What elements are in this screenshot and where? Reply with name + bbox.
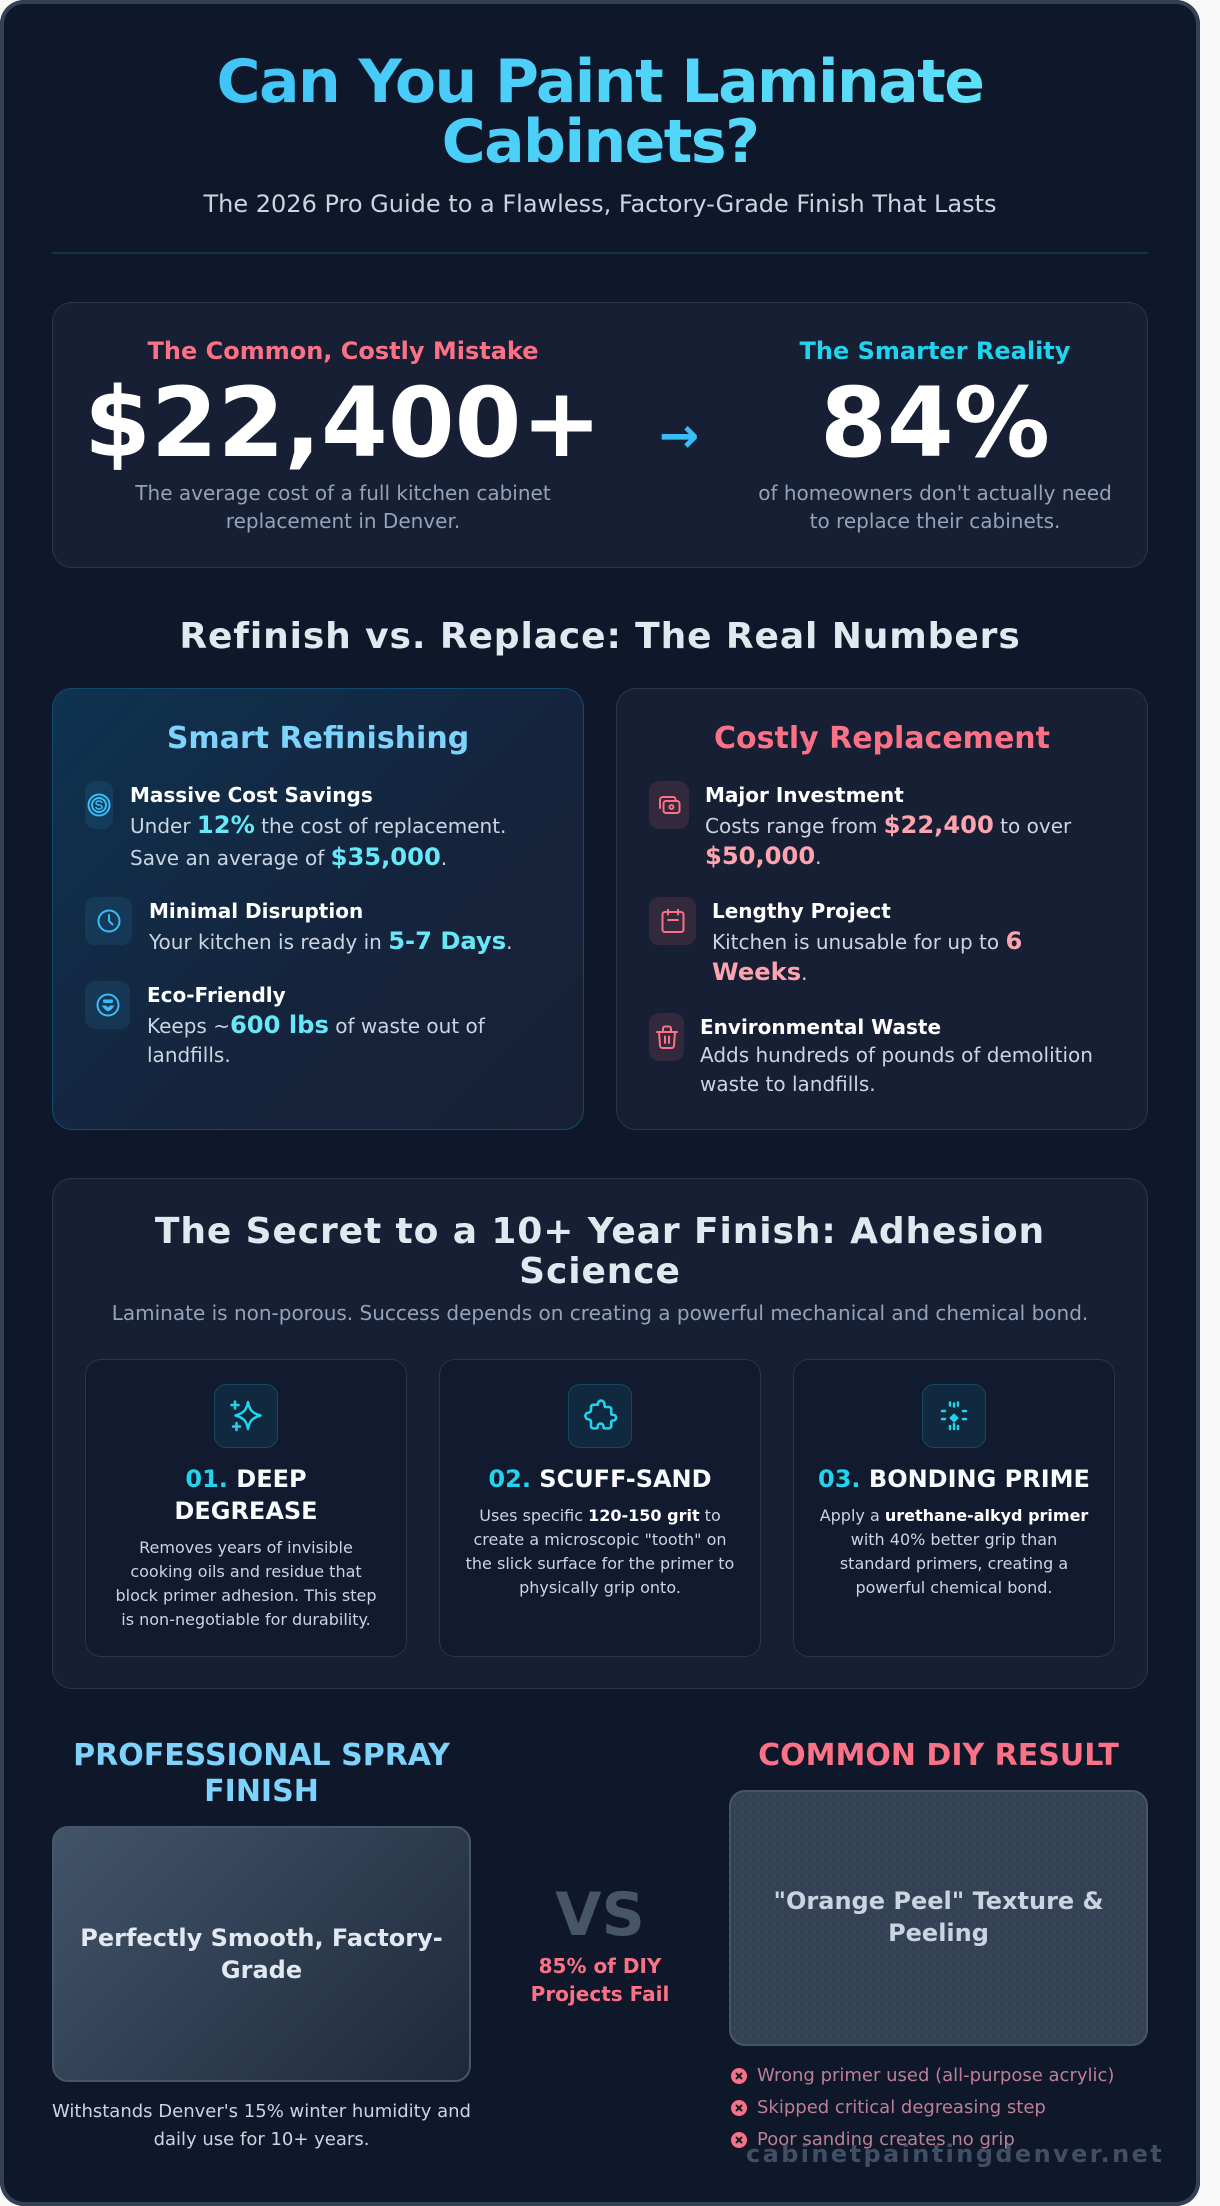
column: professional finish xyxy=(52,1738,471,2150)
list text: Poor sanding creates no grip xyxy=(757,2129,1015,2150)
item title: Major Investment xyxy=(705,783,904,807)
heading: professional spray finish: FINISH xyxy=(204,1774,319,1809)
heading: adhesion science xyxy=(155,1211,1045,1292)
icon: calendar xyxy=(649,897,696,945)
caption: replacement cost: replacement in Denver. xyxy=(226,509,460,533)
step title: 02. SCUFF-SAND xyxy=(488,1465,712,1493)
swatch label xyxy=(80,1924,443,1984)
icon: bonding xyxy=(922,1384,986,1448)
item text: waste to landfills. xyxy=(700,1072,876,1096)
item title: Minimal Disruption xyxy=(149,899,363,923)
item text xyxy=(700,1043,1093,1096)
step description: cooking oils and residue that xyxy=(130,1562,362,1581)
icon: sparkles xyxy=(214,1384,278,1448)
icon: x mark xyxy=(731,2132,747,2148)
step description: Uses specific 120-150 grit to xyxy=(479,1506,721,1525)
title: Can You Paint Laminate xyxy=(217,47,983,117)
step description: Apply a urethane-alkyd primer xyxy=(820,1506,1088,1525)
list item: wrong primer xyxy=(731,2065,1114,2086)
icon: puzzle piece xyxy=(568,1384,632,1448)
step description xyxy=(115,1538,377,1629)
item text: Adds hundreds of pounds of demolition xyxy=(700,1043,1093,1067)
swatch label: Perfectly Smooth, Factory- xyxy=(80,1924,443,1952)
step title: DEGREASE xyxy=(174,1497,318,1525)
step card: scuff-sand xyxy=(439,1359,761,1657)
subtitle: The 2026 Pro Guide to a Flawless, Factory-Grade Finish That Lasts xyxy=(204,190,996,218)
item text: landfills. xyxy=(147,1043,231,1067)
failure list xyxy=(731,2065,1114,2150)
swatch label xyxy=(774,1887,1103,1947)
subheading: adhesion science: Laminate is non-porous. Success depends on creating a powerful mechanical and chemical bond. xyxy=(112,1301,1088,1325)
icon: x mark xyxy=(731,2068,747,2084)
stat: homeowners percentage: 84% xyxy=(820,367,1050,479)
step description: block primer adhesion. This step xyxy=(115,1586,377,1605)
failure stat xyxy=(531,1954,669,2006)
step title: 03. BONDING PRIME xyxy=(818,1465,1090,1493)
item title: Lengthy Project xyxy=(712,899,891,923)
item: major investment xyxy=(649,781,1072,870)
item: lengthy project xyxy=(649,897,1022,986)
VS divider xyxy=(531,1880,669,2006)
step description: the slick surface for the primer to xyxy=(466,1554,734,1573)
heading: smarter reality: The Smarter Reality xyxy=(800,337,1070,365)
title: Cabinets? xyxy=(442,107,758,177)
heading: adhesion science: Science xyxy=(519,1251,681,1292)
step description: is non-negotiable for durability. xyxy=(121,1610,371,1629)
swatch label: Peeling xyxy=(888,1919,989,1947)
failure stat: 85% of DIY xyxy=(539,1954,661,1978)
heading: common DIY result: COMMON DIY RESULT xyxy=(758,1738,1119,1773)
icon: trash xyxy=(649,1013,684,1061)
item text xyxy=(705,811,1072,870)
item text: Kitchen is unusable for up to 6 xyxy=(712,927,1022,955)
heading: smart refinishing: Smart Refinishing xyxy=(167,721,469,756)
list text: Skipped critical degreasing step xyxy=(757,2097,1046,2118)
stat: replacement cost: $22,400+ xyxy=(84,367,602,479)
icon: coin xyxy=(85,781,113,829)
step title: 01. DEEP xyxy=(185,1465,307,1493)
item: environmental waste xyxy=(649,1013,1093,1096)
item: massive cost savings xyxy=(85,781,506,871)
step card: deep degrease xyxy=(85,1359,407,1657)
step description xyxy=(466,1506,734,1597)
step description: with 40% better grip than xyxy=(851,1530,1057,1549)
panel: cost versus reality xyxy=(52,302,1148,568)
caption: homeowners percentage: of homeowners don't actually need xyxy=(758,481,1112,505)
item title: Eco-Friendly xyxy=(147,983,286,1007)
item: minimal disruption xyxy=(85,897,512,955)
caption: durability xyxy=(52,2101,471,2150)
panel: costly replacement xyxy=(616,688,1148,1130)
list text: Wrong primer used (all-purpose acrylic) xyxy=(757,2065,1114,2086)
swatch: smooth finish xyxy=(52,1826,471,2082)
item text: Under 12% the cost of replacement. xyxy=(130,811,506,839)
item text: Keeps ~600 lbs of waste out of xyxy=(147,1011,485,1039)
caption: durability: daily use for 10+ years. xyxy=(154,2129,369,2150)
step description: Removes years of invisible xyxy=(139,1538,353,1557)
caption: replacement cost xyxy=(135,481,551,533)
step description: physically grip onto. xyxy=(519,1578,681,1597)
swatch label: "Orange Peel" Texture & xyxy=(774,1887,1103,1915)
item text: $50,000. xyxy=(705,842,822,870)
swatch label: Grade xyxy=(221,1956,302,1984)
column: DIY result xyxy=(729,1738,1148,2150)
heading: professional spray finish: PROFESSIONAL SPRAY xyxy=(73,1738,450,1773)
list item: skipped degreasing xyxy=(731,2097,1046,2118)
caption: replacement cost: The average cost of a full kitchen cabinet xyxy=(135,481,551,505)
item text: Weeks. xyxy=(712,958,807,986)
item text xyxy=(130,811,506,871)
panel: adhesion science xyxy=(52,1178,1148,1689)
caption: homeowners percentage: to replace their cabinets. xyxy=(810,509,1060,533)
item: eco-friendly xyxy=(85,981,486,1067)
item title: Massive Cost Savings xyxy=(130,783,373,807)
watermark: cabinetpaintingdenver.net xyxy=(746,2140,1164,2168)
step description: create a microscopic "tooth" on xyxy=(473,1530,726,1549)
arrow: → xyxy=(659,408,699,464)
step card: bonding prime xyxy=(793,1359,1115,1657)
step description: standard primers, creating a xyxy=(840,1554,1068,1573)
icon: clock xyxy=(85,897,132,945)
heading: adhesion science: The Secret to a 10+ Year Finish: Adhesion xyxy=(155,1211,1045,1252)
heading: professional spray finish xyxy=(73,1738,450,1809)
step description xyxy=(820,1506,1088,1597)
swatch: orange peel xyxy=(729,1790,1148,2046)
step title xyxy=(174,1465,318,1525)
section heading: real numbers: Refinish vs. Replace: The Real Numbers xyxy=(179,616,1021,657)
icon: money xyxy=(649,781,689,829)
item title: Environmental Waste xyxy=(700,1015,941,1039)
caption: durability: Withstands Denver's 15% winter humidity and xyxy=(52,2101,471,2122)
panel: smart refinishing xyxy=(52,688,584,1130)
icon: globe xyxy=(85,981,130,1029)
icon: x mark xyxy=(731,2100,747,2116)
caption: homeowners percentage xyxy=(758,481,1112,533)
step description: powerful chemical bond. xyxy=(855,1578,1053,1597)
item text: Your kitchen is ready in 5-7 Days. xyxy=(149,927,512,955)
item text xyxy=(147,1011,486,1067)
item text: Costs range from $22,400 to over xyxy=(705,811,1071,839)
failure stat: Projects Fail xyxy=(531,1982,669,2006)
heading: common mistake: The Common, Costly Mistake xyxy=(148,337,538,365)
item text xyxy=(712,927,1022,986)
list item: poor sanding xyxy=(731,2129,1015,2150)
heading: costly replacement: Costly Replacement xyxy=(714,721,1050,756)
item text: Save an average of $35,000. xyxy=(130,843,447,871)
VS text: VS xyxy=(555,1880,645,1950)
title xyxy=(0,52,1200,172)
